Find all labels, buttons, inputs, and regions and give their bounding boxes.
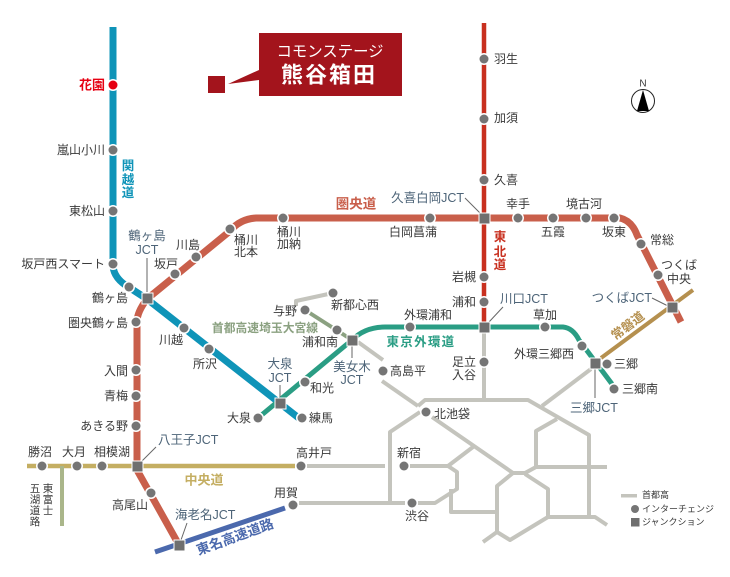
interchange labels: 川越	[159, 333, 183, 347]
interchange labels: 三郷	[614, 357, 638, 371]
interchange labels: あきる野	[80, 419, 128, 433]
interchange labels: 和光	[310, 381, 334, 395]
interchange labels: 坂戸	[154, 257, 178, 271]
compass	[632, 78, 654, 112]
road: Tomei expressway	[155, 500, 298, 552]
junction labels: 美女木	[333, 360, 371, 374]
shuto expressway network	[296, 293, 607, 542]
junction labels: JCT	[136, 243, 159, 257]
junction labels: 八王子JCT	[158, 433, 219, 447]
property marker and callout	[208, 33, 402, 96]
road names: 常磐道	[608, 308, 648, 343]
road: Saitama Omiya route	[300, 288, 430, 508]
interchange labels: 練馬	[309, 411, 333, 425]
road names	[122, 159, 648, 558]
interchange labels: 東松山	[69, 204, 105, 218]
interchange labels: 大泉	[227, 411, 251, 425]
interchange labels: 川島	[176, 237, 200, 252]
interchange labels	[21, 52, 697, 528]
interchange labels: 新都心西	[331, 298, 379, 312]
property marker and callout: コモンステージ	[276, 44, 384, 60]
property marker and callout: 熊谷箱田	[281, 62, 377, 88]
interchange labels: 浦和	[452, 295, 476, 309]
interchange labels: 高井戸	[296, 446, 332, 460]
interchange labels: 足立	[452, 355, 476, 369]
interchange labels: 勝沼	[28, 444, 52, 459]
interchange labels: 三郷南	[622, 381, 658, 396]
legend: インターチェンジ	[642, 504, 714, 514]
interchange labels: 嵐山小川	[57, 143, 105, 157]
road names: 東京外環道	[386, 334, 456, 349]
interchange labels: 鶴ヶ島	[92, 290, 128, 305]
interchange labels: 入間	[104, 364, 128, 378]
interchange labels: 路	[30, 515, 41, 528]
junction labels: つくばJCT	[592, 291, 652, 305]
interchange labels: つくば	[661, 258, 697, 272]
interchange labels: 入谷	[452, 368, 476, 382]
road names: 道	[122, 185, 135, 200]
interchange labels: 外環三郷西	[514, 347, 574, 361]
road names: 関	[122, 159, 134, 173]
interchange labels: 白岡菖蒲	[389, 224, 437, 239]
interchange labels: 五霞	[541, 225, 565, 239]
road names: 中央道	[184, 472, 224, 488]
interchange labels: 圏央鶴ヶ島	[68, 315, 128, 330]
interchange labels: 久喜	[494, 173, 518, 187]
interchange labels: 幸手	[506, 197, 530, 211]
interchange labels: 羽生	[494, 52, 518, 66]
interchange labels: 桶川	[277, 224, 301, 239]
interchange labels: 五	[30, 483, 40, 495]
interchange labels: 岩槻	[452, 269, 476, 284]
legend	[621, 489, 714, 527]
junction labels: 大泉	[267, 356, 293, 371]
legend: ジャンクション	[642, 517, 705, 527]
junction leader lines	[141, 198, 668, 540]
interchange labels: 新宿	[397, 446, 421, 460]
interchange labels: 坂戸西スマート	[21, 257, 105, 271]
junction labels: 久喜白岡JCT	[391, 190, 464, 205]
road names: 首都高速埼玉大宮線	[212, 321, 318, 335]
interchange labels: 中央	[667, 271, 691, 286]
interchange labels: 北池袋	[434, 407, 470, 421]
interchange labels: 加納	[277, 236, 301, 251]
road names: 北	[494, 245, 507, 259]
road: Joban expressway	[601, 290, 693, 358]
road names: 東名高速道路	[194, 515, 276, 558]
road names: 圏央道	[336, 196, 377, 212]
interchange labels: 花園	[79, 78, 105, 92]
road names: 越	[122, 172, 135, 187]
interchange labels: 富	[43, 493, 53, 506]
junction labels: 鶴ヶ島	[128, 228, 166, 243]
interchange labels: 湖	[30, 494, 40, 506]
interchange labels: 外環浦和	[404, 308, 452, 322]
interchange labels: 大月	[62, 445, 86, 459]
junction labels: 海老名JCT	[175, 507, 236, 522]
interchange labels: 東	[43, 482, 54, 495]
interchange labels: 桶川	[234, 232, 258, 247]
junction labels: JCT	[269, 371, 292, 385]
interchange labels: 常総	[650, 232, 674, 247]
legend: 首都高	[642, 489, 669, 500]
interchange labels: 相模湖	[94, 444, 130, 459]
interchange labels: 士	[43, 504, 53, 517]
interchange labels: 坂東	[602, 225, 626, 239]
interchange labels: 北本	[234, 245, 258, 259]
road names: 東	[494, 229, 507, 244]
interchange labels: 所沢	[193, 357, 217, 371]
compass: N	[639, 78, 647, 90]
interchange labels: 高島平	[390, 363, 426, 378]
junction labels: 三郷JCT	[570, 401, 618, 415]
road: Chuo expressway	[27, 462, 306, 526]
interchange labels: 高尾山	[112, 498, 148, 512]
road: Kan-Etsu expressway	[108, 27, 306, 422]
junction labels	[128, 190, 652, 522]
interchange labels: 青梅	[104, 389, 128, 403]
interchange labels: 浦和南	[302, 334, 338, 349]
interchange labels: 草加	[533, 308, 557, 322]
interchange labels: 渋谷	[405, 509, 429, 523]
junction squares	[132, 213, 678, 551]
junction labels: 川口JCT	[500, 292, 548, 306]
road: Ken-O expressway	[132, 214, 681, 545]
road: Tohoku expressway	[480, 23, 488, 366]
interchange labels: 用賀	[274, 486, 298, 500]
interchange labels: 与野	[273, 304, 297, 318]
interchange labels: 道	[30, 504, 41, 517]
road: Tokyo Gaikan expressway	[254, 322, 618, 422]
interchange labels: 境古河	[566, 196, 602, 211]
road names: 道	[494, 257, 507, 272]
interchange labels: 加須	[494, 111, 518, 125]
junction labels: JCT	[341, 373, 364, 387]
